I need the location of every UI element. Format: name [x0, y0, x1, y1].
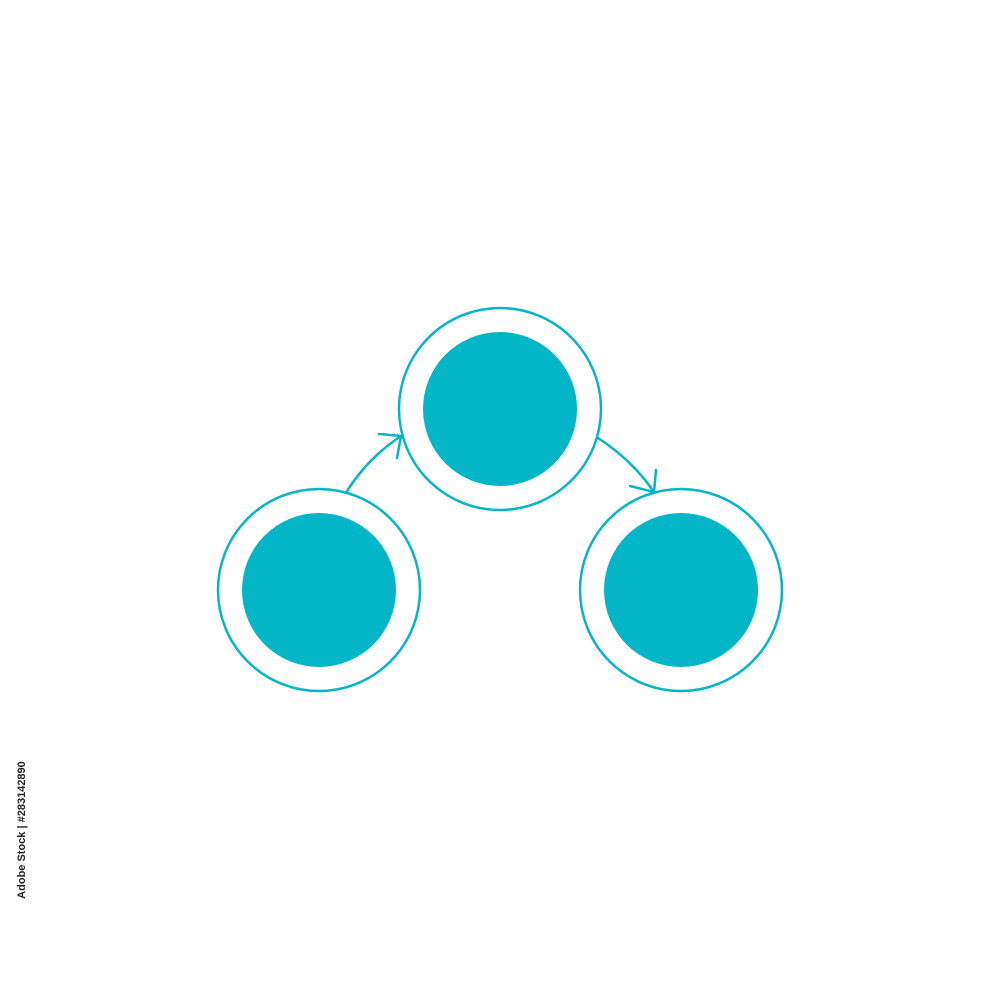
arrow: top to right: [598, 438, 656, 492]
node: right circle: [580, 489, 782, 691]
side text: stock id: Adobe Stock | #283142890: [16, 761, 28, 899]
node: top circle: [399, 308, 601, 510]
arrow: left to top: [347, 434, 401, 491]
node: left circle: [218, 489, 420, 691]
